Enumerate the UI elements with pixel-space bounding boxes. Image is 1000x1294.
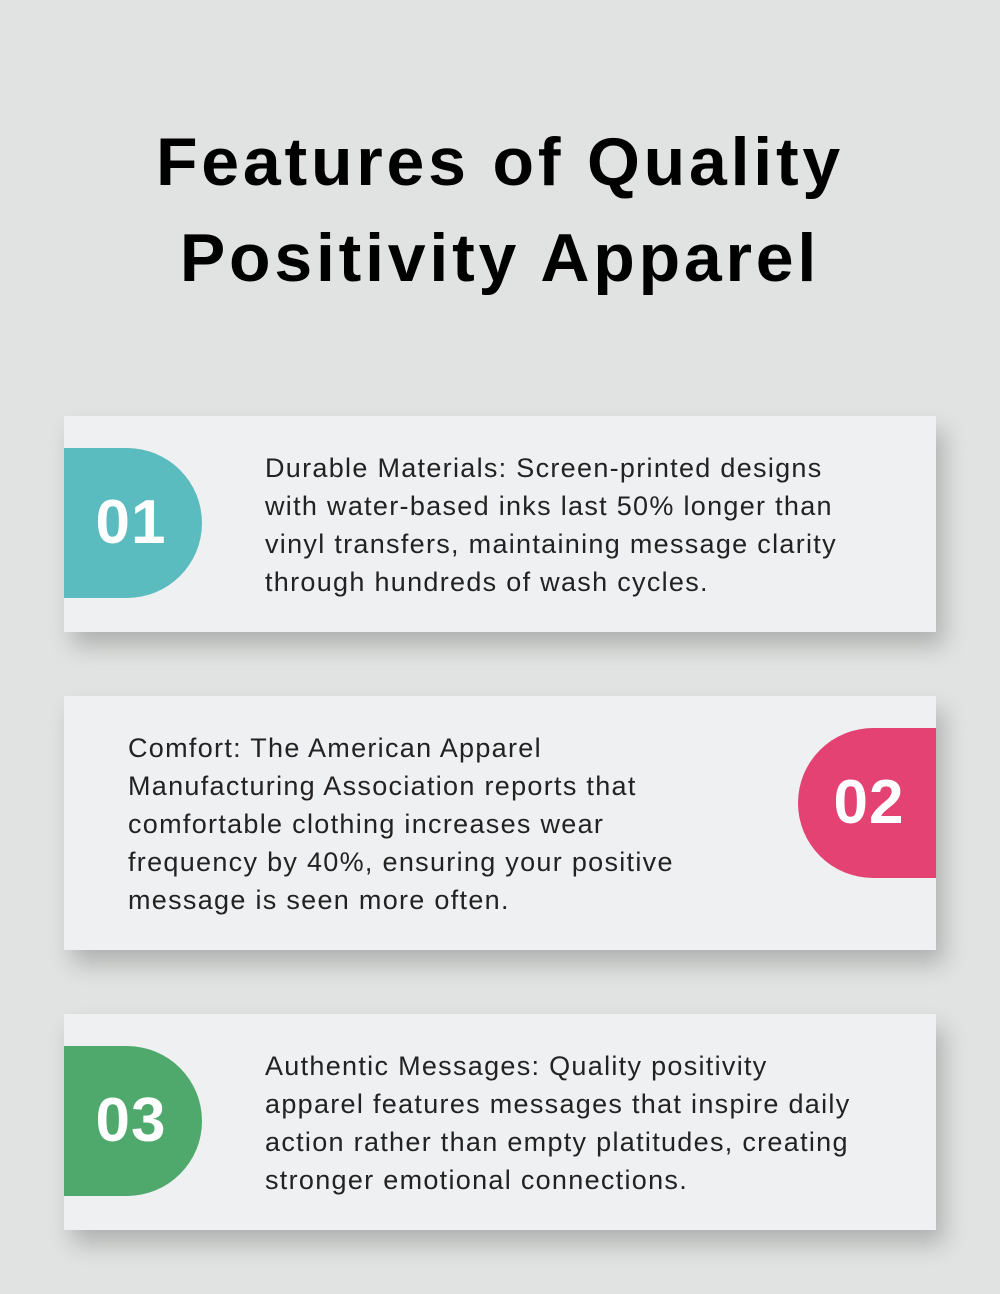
text 1: through hundreds of wash cycles. <box>265 567 709 597</box>
badge 03: 03 <box>96 1086 166 1155</box>
text 3: action rather than empty platitudes, creating <box>265 1127 849 1157</box>
card 2 <box>64 696 936 950</box>
text 3: Authentic Messages: Quality positivity <box>265 1051 768 1081</box>
text 2: comfortable clothing increases wear <box>128 809 604 839</box>
card 1 <box>64 416 936 632</box>
badge 01 <box>64 448 202 598</box>
card 3 <box>64 1014 936 1230</box>
text 2 <box>128 733 674 915</box>
text 2: Comfort: The American Apparel <box>128 733 542 763</box>
badge 01: 01 <box>96 488 166 557</box>
text 1: Durable Materials: Screen-printed designs <box>265 453 823 483</box>
text 1 <box>265 453 837 597</box>
badge 02: 02 <box>834 768 904 837</box>
badge 03 <box>64 1046 202 1196</box>
text 2: frequency by 40%, ensuring your positive <box>128 847 674 877</box>
text 3: apparel features messages that inspire daily <box>265 1089 850 1119</box>
badge 02 <box>798 728 936 878</box>
text 2: message is seen more often. <box>128 885 510 915</box>
title: Features of Quality <box>156 124 844 200</box>
text 3 <box>265 1051 850 1195</box>
title <box>156 124 844 296</box>
text 3: stronger emotional connections. <box>265 1165 688 1195</box>
text 1: vinyl transfers, maintaining message clarity <box>265 529 837 559</box>
text 1: with water-based inks last 50% longer than <box>265 491 833 521</box>
title: Positivity Apparel <box>180 220 820 296</box>
text 2: Manufacturing Association reports that <box>128 771 637 801</box>
